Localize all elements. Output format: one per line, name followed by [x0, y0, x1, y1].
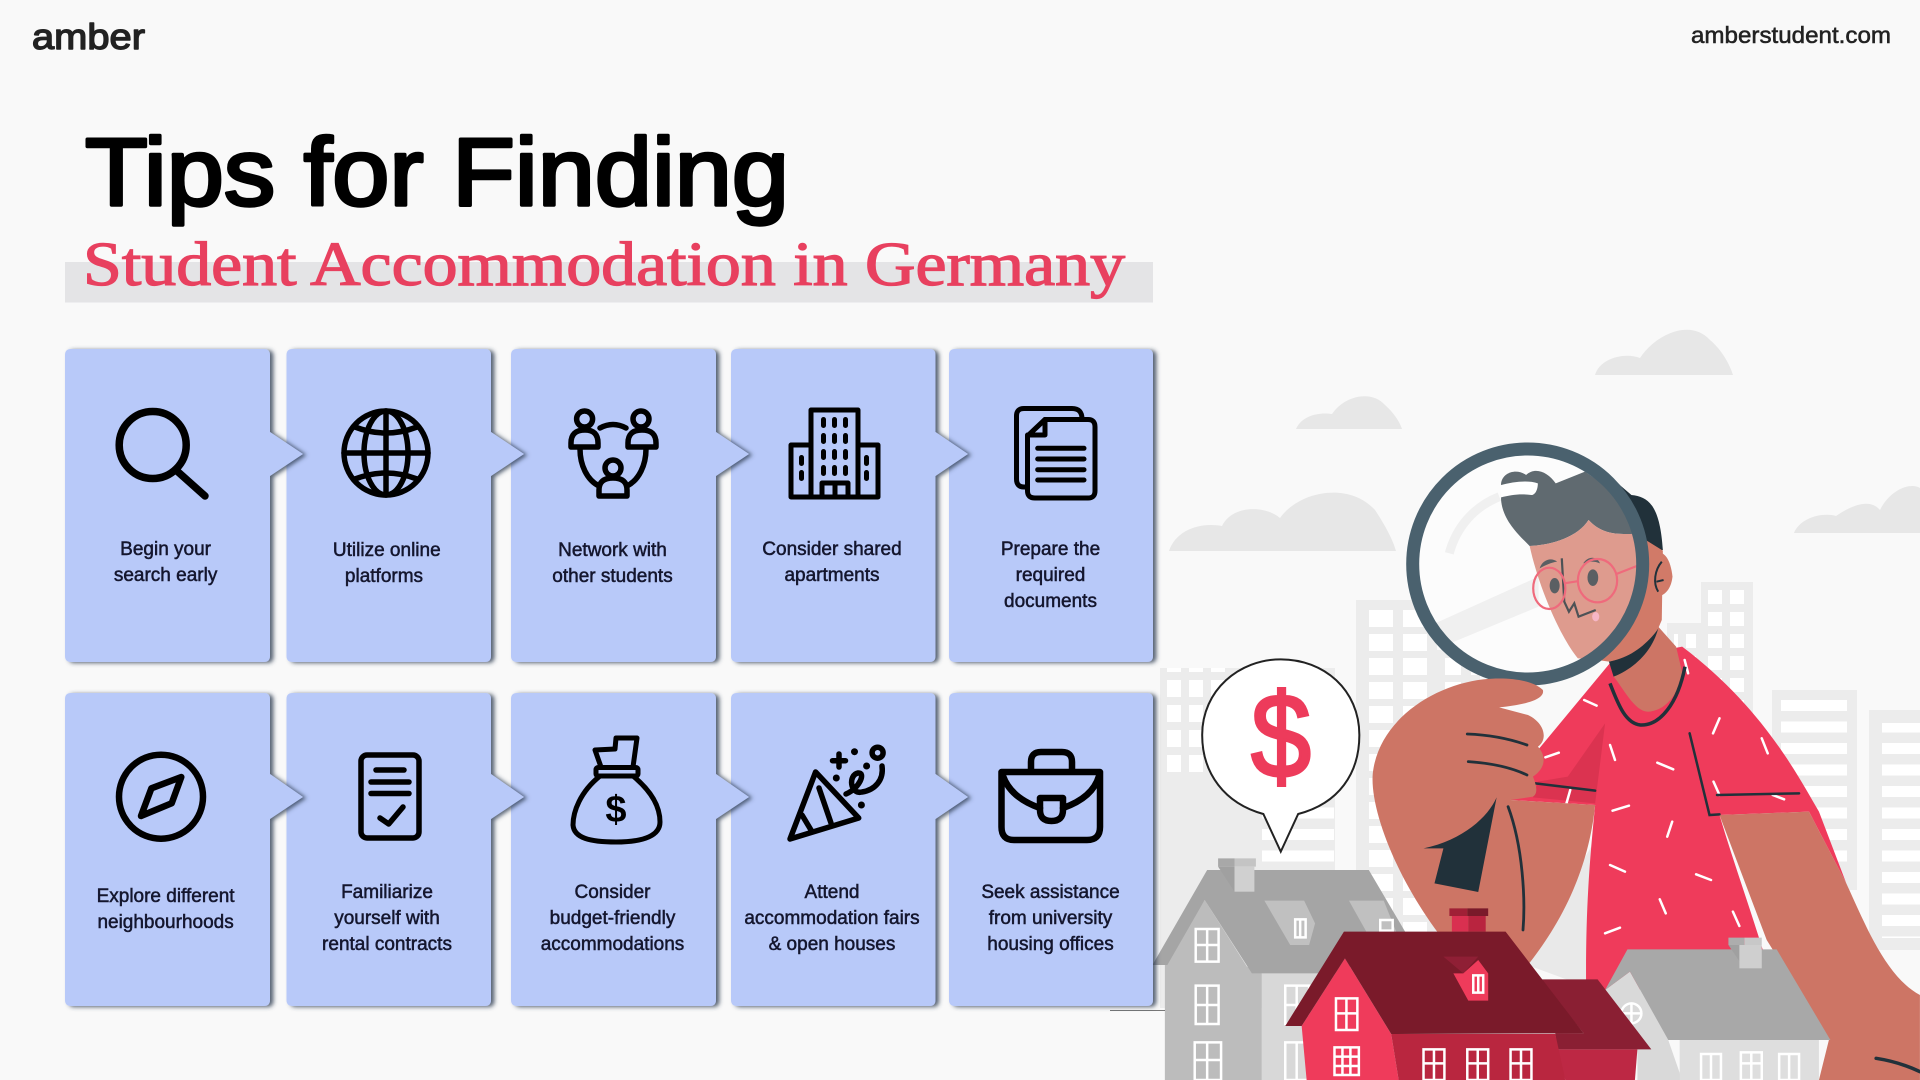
arm and fingers: [1373, 678, 1595, 965]
panel: card 6 explore neighbourhoods: [65, 693, 303, 1006]
illustration: magnifying lens: [1413, 449, 1646, 679]
label: Begin your: [120, 539, 212, 560]
icon: money bag: [573, 738, 660, 842]
ground line: [1110, 1010, 1165, 1011]
right arm: [1719, 812, 1920, 1080]
label: apartments: [784, 565, 880, 586]
collar line: [1610, 667, 1685, 725]
lens glare: [1436, 577, 1538, 642]
panel: card 7 rental contracts: [286, 693, 524, 1006]
icon: contract with tick: [361, 755, 419, 838]
label: budget-friendly: [550, 908, 676, 929]
shirt shading: [1533, 723, 1605, 803]
subtitle highlight band: [65, 262, 1153, 302]
shirt ticks and folds: [1535, 660, 1920, 1072]
lens ring: [1413, 449, 1643, 679]
label: other students: [552, 566, 673, 587]
label: Utilize online: [333, 540, 441, 561]
panel: card 3 network: [511, 349, 749, 662]
speech bubble with dollar sign: $: [1251, 669, 1311, 803]
title: Tips for Finding: [85, 119, 789, 226]
label: & open houses: [769, 934, 895, 955]
label: Seek assistance: [981, 882, 1120, 903]
label: rental contracts: [322, 934, 452, 955]
icon: compass: [119, 755, 203, 839]
icon: globe: [344, 411, 428, 495]
glasses: [1533, 559, 1637, 609]
illustration: red house: [1285, 908, 1651, 1080]
label: documents: [1004, 591, 1097, 612]
label: Familiarize: [341, 882, 433, 903]
label: Explore different: [97, 886, 235, 907]
dark back hair: [1610, 477, 1663, 553]
illustration: grey house right: [1605, 938, 1830, 1080]
eyebrows: [1540, 558, 1600, 568]
illustration: hand and forearm: [1373, 678, 1595, 965]
background city skyline: [1160, 582, 1920, 1008]
panel: card 2 online platforms: [286, 349, 524, 662]
label: from university: [989, 908, 1113, 929]
illustration: grey house left: [1152, 858, 1406, 1080]
magnified face: [1530, 520, 1646, 660]
brand logo: amber: [32, 16, 145, 57]
hair highlight: [1500, 482, 1538, 497]
finger and arm lines: [1467, 734, 1527, 930]
label: accommodation fairs: [744, 908, 920, 929]
icon: magnifying glass: [119, 412, 205, 496]
tongue: [1592, 612, 1599, 621]
label: Network with: [558, 540, 667, 561]
panel: card 4 shared apartments: [731, 349, 968, 662]
icon: briefcase: [1002, 752, 1100, 840]
label: Attend: [805, 882, 859, 903]
label: search early: [114, 565, 218, 586]
lens glass: [1413, 449, 1643, 679]
panel: card 8 budget friendly: [511, 693, 749, 1006]
label: yourself with: [334, 908, 440, 929]
label: neighbourhoods: [97, 912, 234, 933]
ear: [1646, 552, 1672, 597]
sleeve shadow: [1424, 797, 1497, 892]
magnified hair: [1501, 471, 1646, 546]
shirt: [1511, 647, 1846, 993]
outer face: [1574, 533, 1663, 662]
label: housing offices: [987, 934, 1114, 955]
background clouds: [1169, 330, 1920, 551]
label: Prepare the: [1001, 539, 1100, 560]
label: Consider shared: [762, 539, 902, 560]
panel: card 10 seek assistance: [949, 693, 1153, 1006]
label: Consider: [574, 882, 651, 903]
website address: amberstudent.com: [1691, 22, 1891, 48]
icon: documents: [1016, 408, 1095, 498]
panel: card 9 attend fairs: [731, 693, 968, 1006]
illustration: person behind the lens: [1511, 477, 1920, 1080]
neck: [1610, 627, 1683, 712]
icon: party popper: [790, 747, 883, 839]
icon: network of people: [571, 411, 656, 496]
icon: money bag: $: [605, 789, 627, 831]
label: accommodations: [541, 934, 684, 955]
panel: card 1 begin search: [65, 349, 303, 662]
eyes: [1550, 578, 1560, 593]
icon: apartment building: [791, 410, 878, 497]
subtitle: Student Accommodation in Germany: [83, 231, 1125, 299]
nose and mouth line: [1562, 558, 1596, 617]
under chin shadow: [1609, 628, 1658, 677]
label: platforms: [345, 566, 423, 587]
panel: card 5 prepare documents: [949, 349, 1153, 662]
label: required: [1016, 565, 1085, 586]
shadow wedge behind shirt: [1523, 840, 1595, 987]
speech bubble with dollar sign: [1202, 659, 1359, 852]
